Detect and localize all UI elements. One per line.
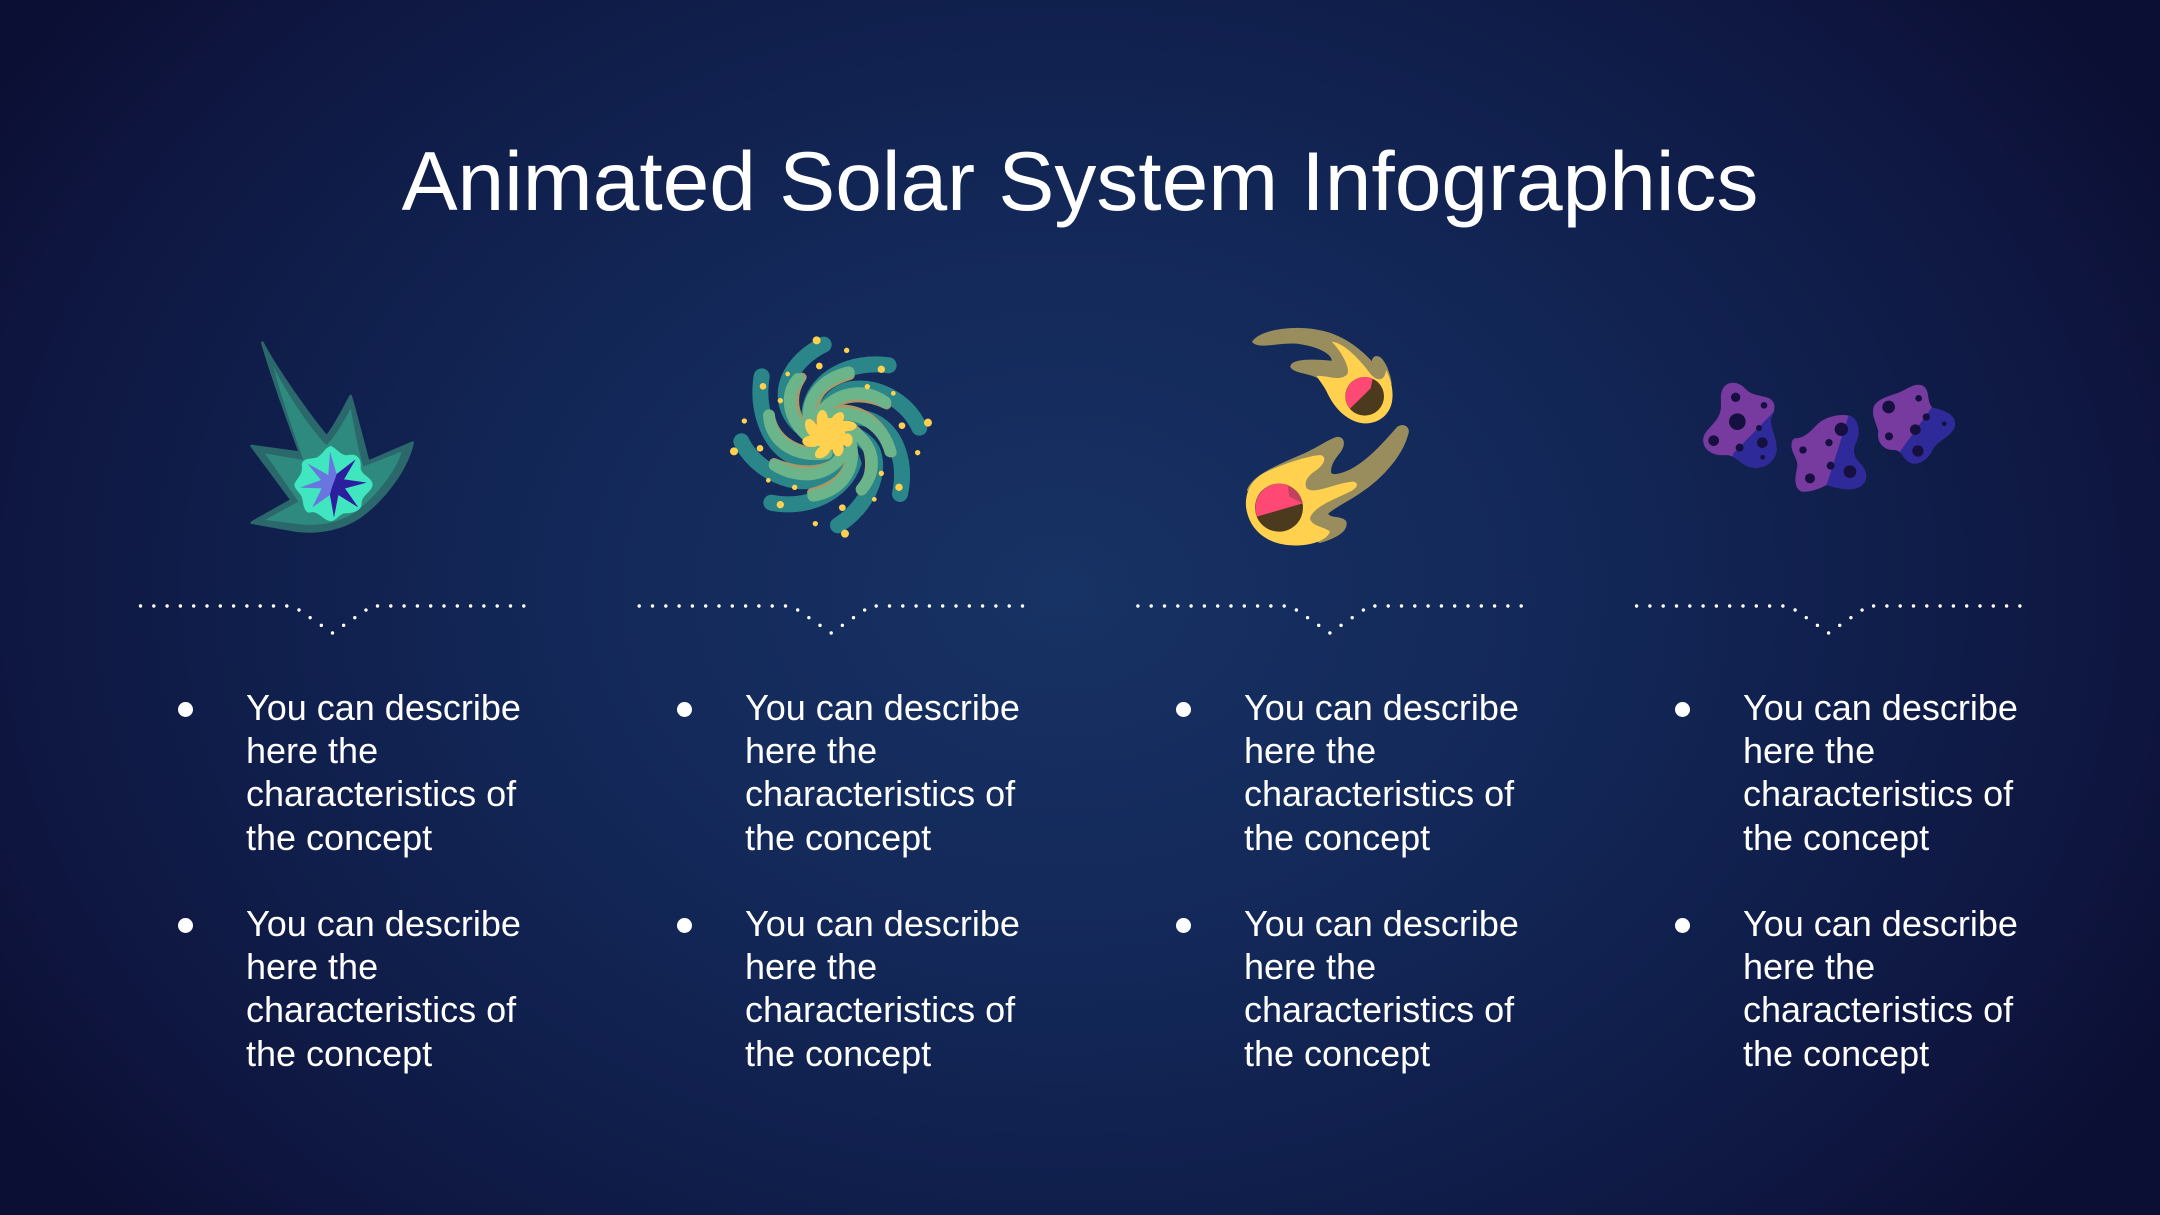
- asteroid: left: [1703, 383, 1780, 473]
- asteroid: middle: [1791, 413, 1870, 493]
- text block: characteristics of: [1743, 773, 2013, 814]
- bullet: [1674, 702, 1690, 717]
- text block: here the: [745, 730, 877, 771]
- text block: characteristics of: [745, 989, 1015, 1030]
- text block: You can describe: [1743, 903, 2018, 944]
- text block: [1743, 687, 2018, 858]
- text block: the concept: [1743, 817, 1929, 858]
- text block: [246, 687, 521, 858]
- text block: [745, 687, 1020, 858]
- text block: You can describe: [1244, 903, 1519, 944]
- text block: here the: [1743, 730, 1875, 771]
- text block: the concept: [246, 817, 432, 858]
- comet: top: [1254, 330, 1393, 423]
- text block: characteristics of: [246, 989, 516, 1030]
- bullet: [1176, 918, 1190, 933]
- text block: You can describe: [246, 903, 521, 944]
- text block: here the: [745, 946, 877, 987]
- icon: comets: [1246, 330, 1407, 546]
- icon: supernova: [252, 343, 413, 531]
- text block: You can describe: [745, 903, 1020, 944]
- bullet: [676, 918, 692, 933]
- text block: You can describe: [1743, 687, 2018, 728]
- bullet: [1674, 918, 1690, 933]
- text block: the concept: [1244, 1033, 1430, 1074]
- text block: here the: [1743, 946, 1875, 987]
- text block: the concept: [246, 1033, 432, 1074]
- asteroid: right: [1873, 384, 1955, 464]
- text block: characteristics of: [246, 773, 516, 814]
- connector: column 1: [140, 606, 525, 633]
- bullet: [178, 702, 192, 717]
- comet: bottom: [1246, 426, 1407, 546]
- text block: characteristics of: [745, 773, 1015, 814]
- text block: You can describe: [745, 687, 1020, 728]
- text block: You can describe: [1244, 687, 1519, 728]
- text block: here the: [246, 946, 378, 987]
- bullet: [676, 702, 692, 717]
- text block: the concept: [1743, 1033, 1929, 1074]
- connector: column 3: [1138, 606, 1522, 633]
- connector: column 4: [1637, 606, 2021, 633]
- connector: column 2: [639, 606, 1024, 633]
- text block: [1244, 687, 1519, 858]
- text block: the concept: [745, 1033, 931, 1074]
- text block: [1743, 903, 2018, 1074]
- title: Animated Solar System Infographics: [402, 134, 1758, 228]
- icons and dotted connectors: [138, 328, 2022, 635]
- text block: characteristics of: [1244, 989, 1514, 1030]
- text block: [1244, 903, 1519, 1074]
- text block: here the: [1244, 730, 1376, 771]
- text block: here the: [1244, 946, 1376, 987]
- icon: spiral galaxy: [730, 336, 932, 538]
- text block: characteristics of: [1244, 773, 1514, 814]
- text block: the concept: [745, 817, 931, 858]
- text block: You can describe: [246, 687, 521, 728]
- icon: asteroids: [1703, 383, 1960, 493]
- bullet: [1176, 702, 1190, 717]
- text block: characteristics of: [1743, 989, 2013, 1030]
- text block: the concept: [1244, 817, 1430, 858]
- text block: [246, 903, 521, 1074]
- text block: [745, 903, 1020, 1074]
- text block: here the: [246, 730, 378, 771]
- bullet: [178, 918, 192, 933]
